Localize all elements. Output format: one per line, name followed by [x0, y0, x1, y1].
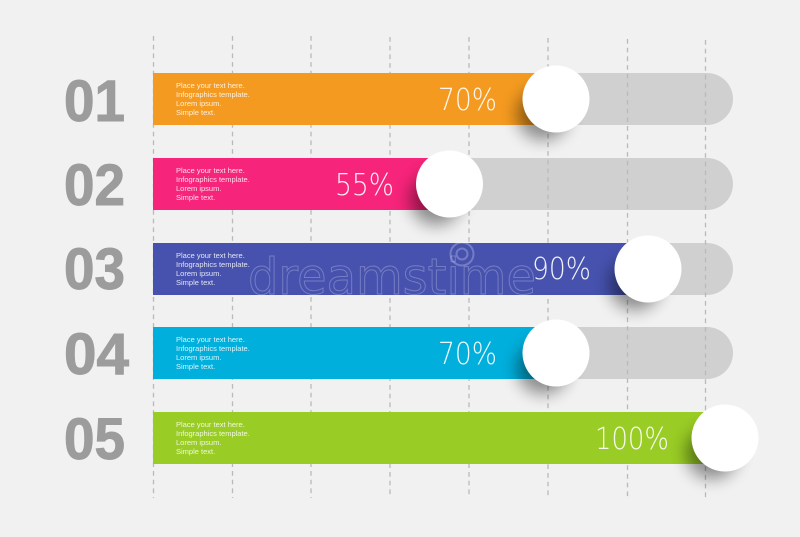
bar text: Simple text.: [176, 447, 215, 456]
bar text: Lorem ipsum.: [176, 184, 221, 193]
bar 90%: [153, 243, 645, 295]
number 01: 01: [64, 69, 125, 134]
watermark: dreamstime: [248, 248, 536, 306]
percentage: 90%: [532, 252, 591, 287]
bar text: Simple text.: [176, 193, 215, 202]
bar text: Simple text.: [176, 362, 215, 371]
circle shadow: [686, 427, 738, 479]
bar text: Place your text here.: [176, 251, 245, 260]
bar text: Simple text.: [176, 278, 215, 287]
bar text: Place your text here.: [176, 335, 245, 344]
bar 70%: [153, 73, 553, 125]
bar text: Infographics template.: [176, 344, 250, 353]
bar text: Infographics template.: [176, 429, 250, 438]
bar 55%: [153, 158, 448, 210]
row 05: [64, 404, 758, 479]
bar text: Simple text.: [176, 108, 215, 117]
number 05: 05: [64, 407, 125, 472]
knob: [522, 66, 590, 132]
knob: [522, 320, 590, 386]
circle shadow: [609, 258, 661, 310]
row 03: [64, 236, 682, 310]
circle shadow: [517, 88, 569, 140]
row 04: [64, 320, 590, 394]
bar text: Infographics template.: [176, 175, 250, 184]
bar text: Infographics template.: [176, 260, 250, 269]
percentage: 70%: [438, 83, 497, 118]
bar text: Lorem ipsum.: [176, 269, 221, 278]
knob: [692, 404, 758, 472]
bar text: Place your text here.: [176, 420, 245, 429]
bar text: Lorem ipsum.: [176, 99, 221, 108]
percentage: 55%: [335, 168, 394, 203]
bar text: Place your text here.: [176, 166, 245, 175]
row 02: [64, 150, 483, 225]
number 04: 04: [64, 322, 129, 387]
bar 70%: [153, 327, 553, 379]
circle shadow: [410, 173, 462, 225]
percentage: 100%: [595, 422, 669, 457]
percentage: 70%: [438, 337, 497, 372]
number 03: 03: [64, 237, 125, 302]
bar text: Infographics template.: [176, 90, 250, 99]
grey tracks: [153, 73, 733, 379]
bar text: Place your text here.: [176, 81, 245, 90]
row 01: [64, 66, 590, 140]
knob: [416, 150, 483, 218]
circle shadow: [517, 342, 569, 394]
knob: [614, 236, 682, 302]
bar 100%: [153, 412, 723, 464]
number 02: 02: [64, 153, 125, 218]
bar text: Lorem ipsum.: [176, 438, 221, 447]
bar text: Lorem ipsum.: [176, 353, 221, 362]
